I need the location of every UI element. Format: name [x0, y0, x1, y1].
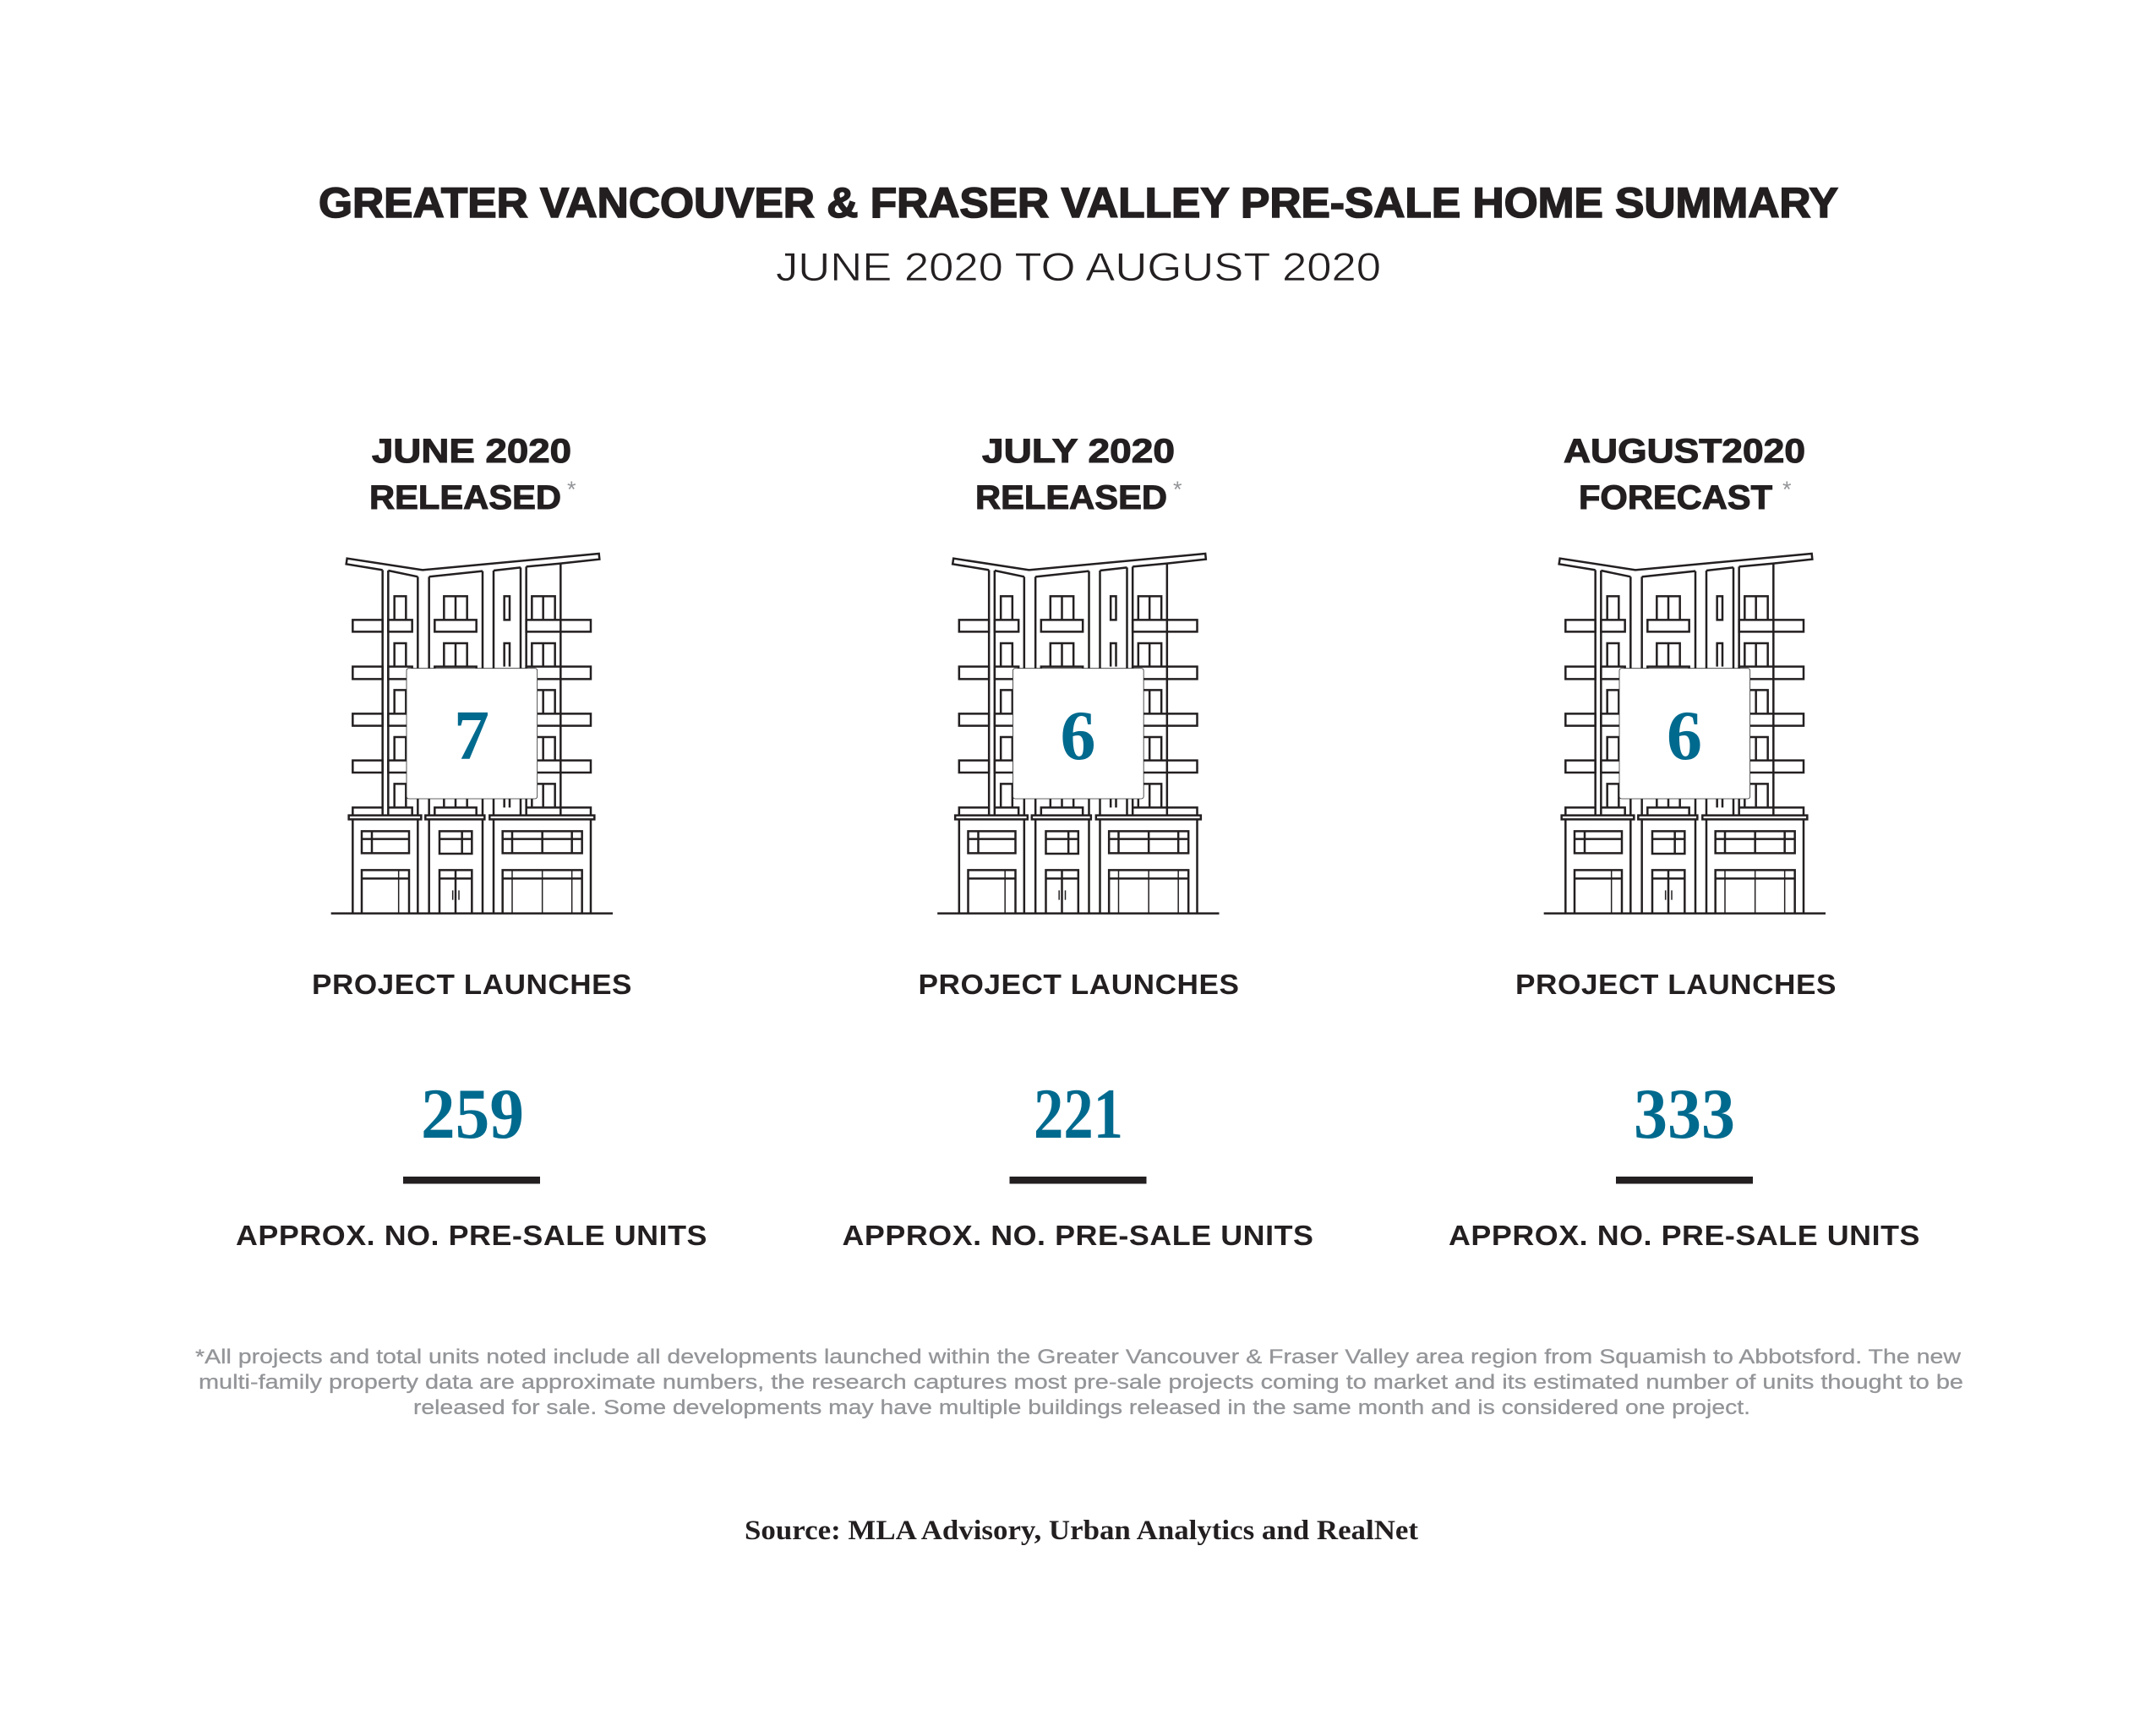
icon: apartment building [331, 554, 613, 914]
subtitle: JUNE 2020 TO AUGUST 2020 [776, 244, 1381, 289]
heading: June 2020 released [369, 433, 576, 516]
project launches number: 7 [454, 696, 489, 775]
footnote [195, 1346, 1963, 1419]
pre-sale units number: 333 [1634, 1074, 1735, 1154]
divider bar [403, 1177, 540, 1183]
source line: Source: MLA Advisory, Urban Analytics and RealNet [745, 1516, 1418, 1546]
heading: July 2020 released: JULY 2020 [982, 433, 1175, 470]
divider bar [1009, 1177, 1146, 1183]
pre-sale units number: 259 [421, 1074, 524, 1154]
divider bar [1616, 1177, 1753, 1183]
panel: June 2020 [236, 433, 707, 1251]
icon: apartment building [1544, 554, 1826, 914]
heading: July 2020 released: RELEASED [975, 479, 1167, 516]
pre-sale units number: 221 [1034, 1074, 1123, 1154]
heading: August 2020 forecast: AUGUST2020 [1564, 433, 1805, 470]
heading: August 2020 forecast [1564, 433, 1805, 516]
project launches label: PROJECT LAUNCHES [918, 969, 1239, 1000]
project launches label: PROJECT LAUNCHES [312, 969, 632, 1000]
heading: July 2020 released: * [1173, 477, 1182, 502]
heading: June 2020 released: RELEASED [369, 479, 561, 516]
pre-sale units label: APPROX. NO. PRE-SALE UNITS [1449, 1220, 1920, 1251]
heading: August 2020 forecast: FORECAST [1579, 479, 1772, 516]
footnote: multi-family property data are approximate numbers, the research captures most pre-sale projects coming to market and its estimated number of units thought to be [199, 1371, 1963, 1394]
heading: June 2020 released: JUNE 2020 [372, 433, 571, 470]
icon: apartment building [937, 554, 1219, 914]
project launches number: 6 [1667, 696, 1702, 775]
heading: August 2020 forecast: * [1782, 477, 1792, 502]
footnote: released for sale. Some developments may have multiple buildings released in the same month and is considered one project. [413, 1396, 1750, 1419]
project launches number: 6 [1060, 696, 1095, 775]
footnote: *All projects and total units noted include all developments launched within the Greater Vancouver & Fraser Valley area region from Squamish to Abbotsford. The new [195, 1346, 1962, 1368]
pre-sale units label: APPROX. NO. PRE-SALE UNITS [236, 1220, 707, 1251]
panel: August 2020 [1449, 433, 1920, 1251]
heading: June 2020 released: * [567, 477, 576, 502]
panel: July 2020 [842, 433, 1313, 1251]
pre-sale units label: APPROX. NO. PRE-SALE UNITS [842, 1220, 1313, 1251]
title: GREATER VANCOUVER & FRASER VALLEY PRE-SALE HOME SUMMARY [319, 179, 1838, 227]
heading: July 2020 released [975, 433, 1182, 516]
project launches label: PROJECT LAUNCHES [1515, 969, 1837, 1000]
